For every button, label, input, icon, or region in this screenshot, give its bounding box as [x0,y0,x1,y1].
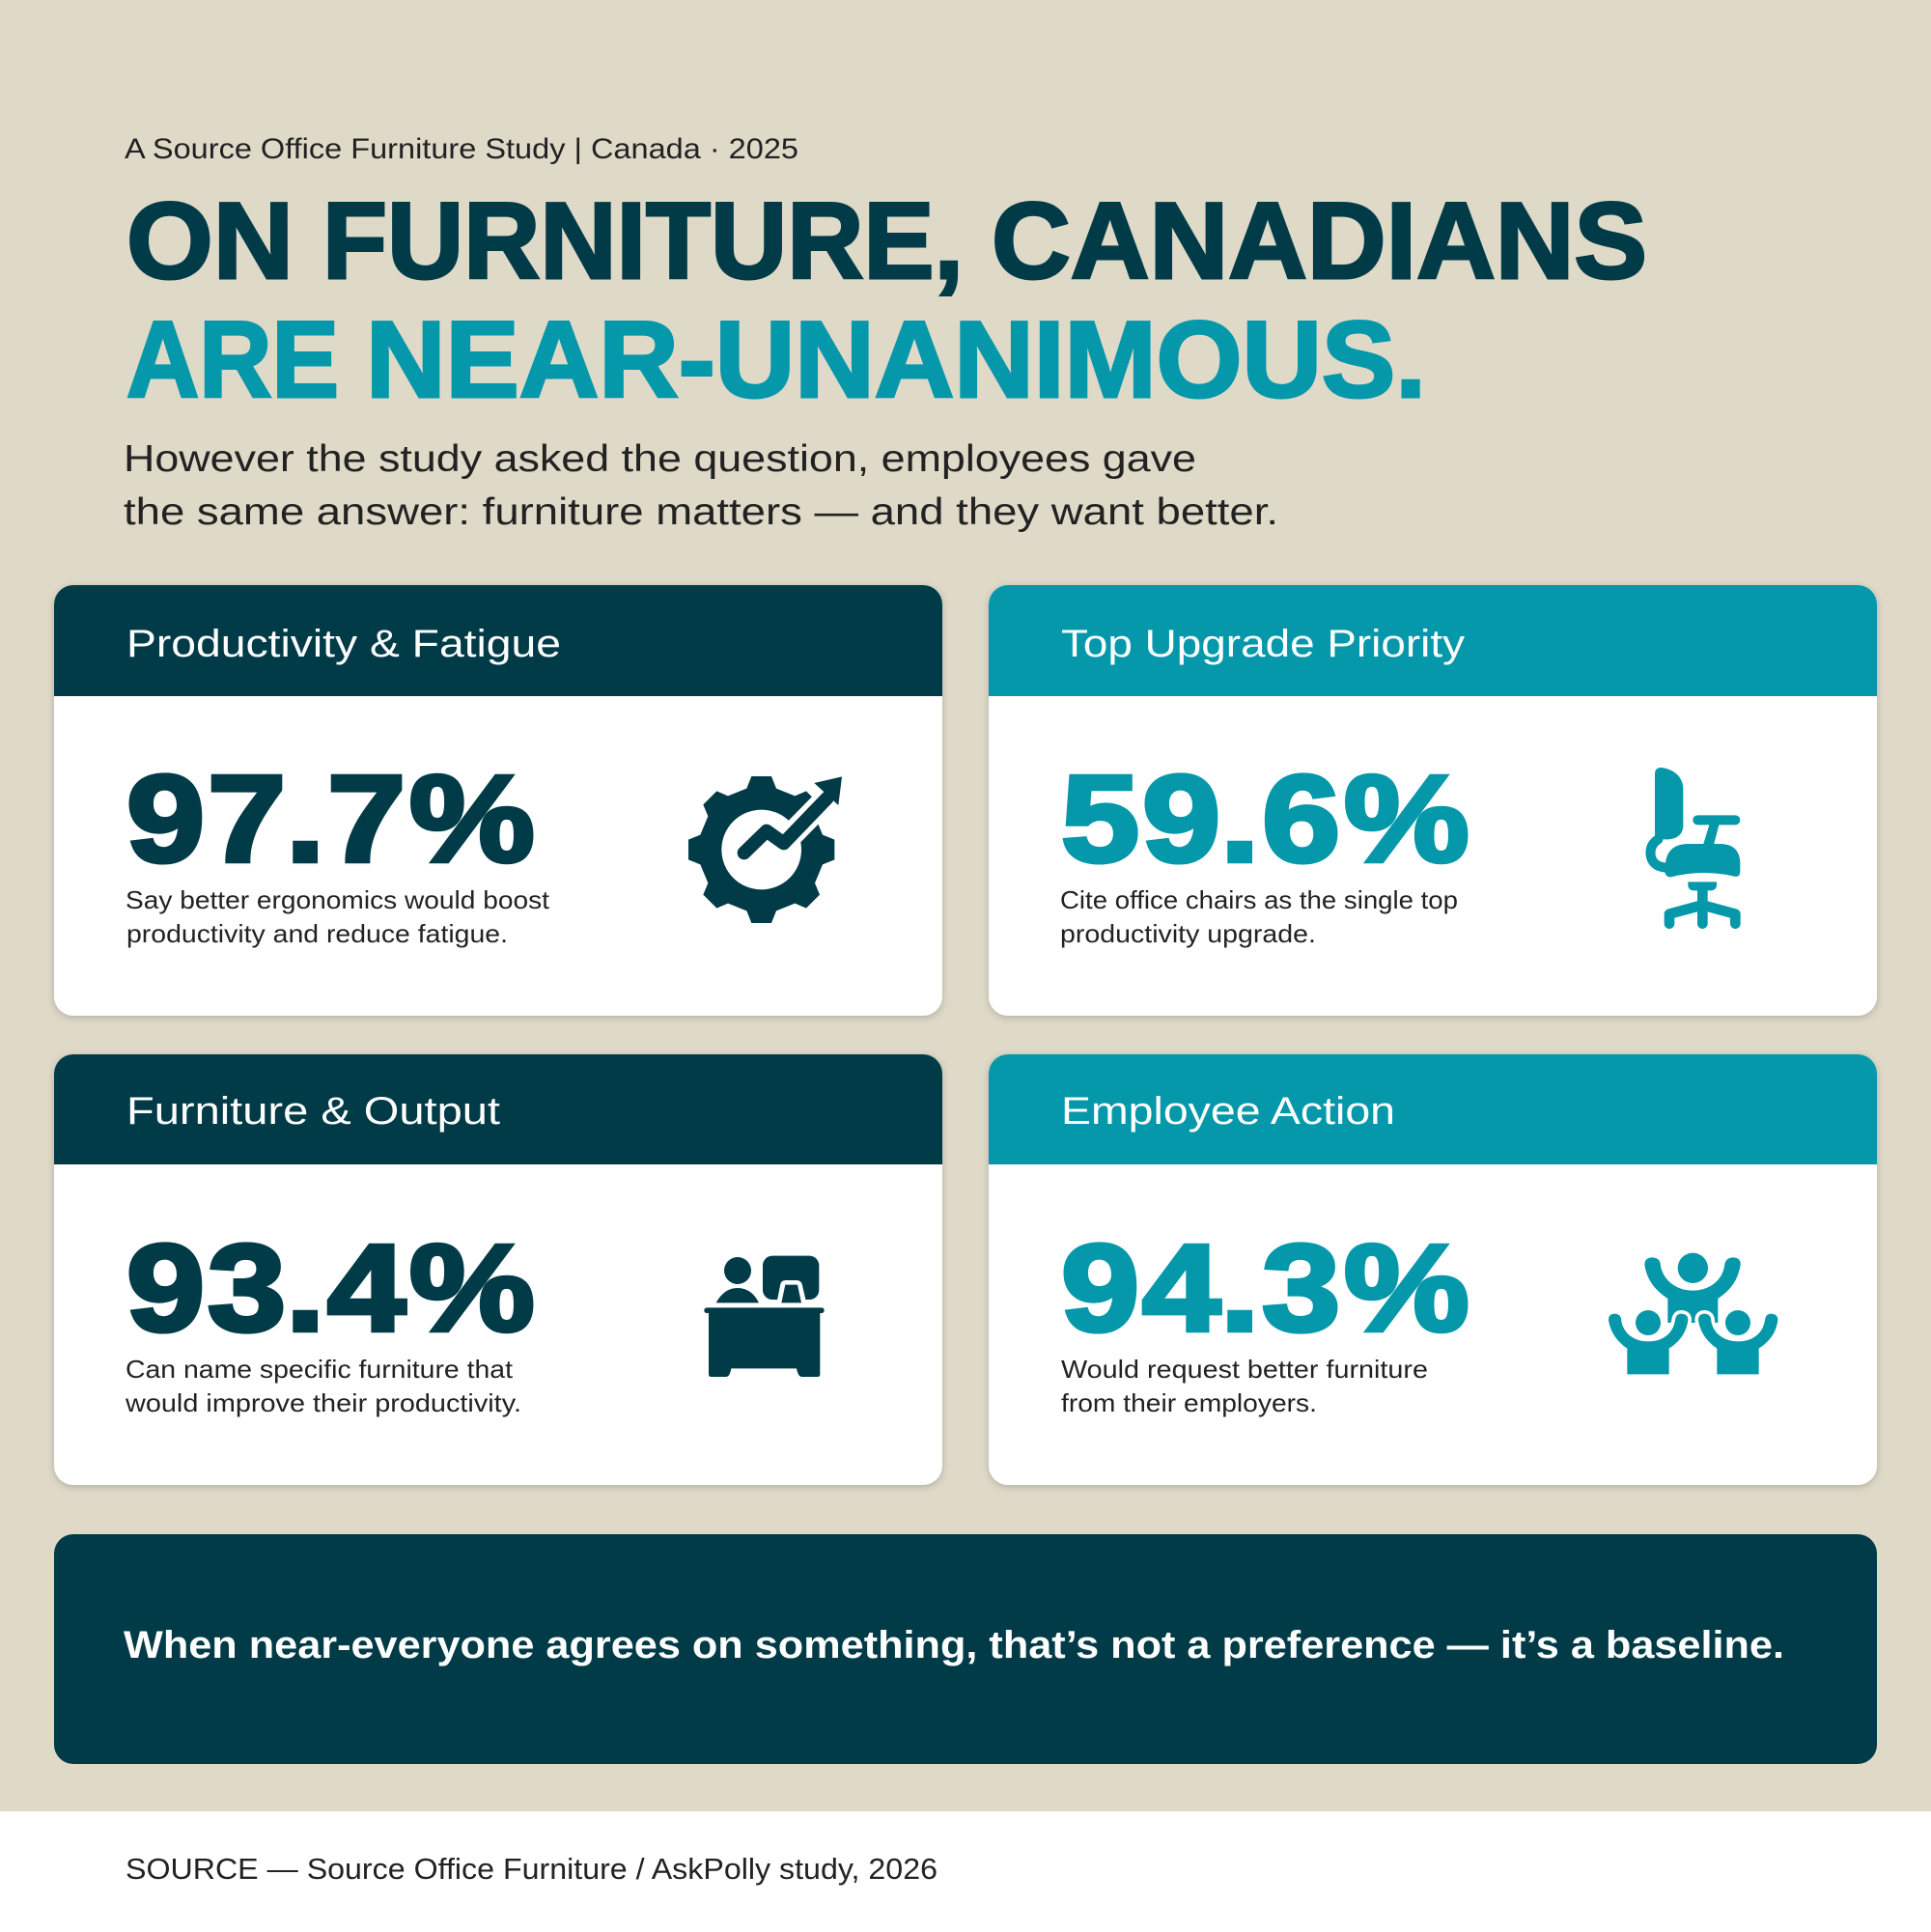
panel: furniture and output [54,1054,942,1485]
subtitle: However the study asked the question, employees gave [124,438,1196,480]
description: Cite office chairs as the single top [1060,885,1458,914]
panel: productivity and fatigue [54,585,942,1016]
panel heading: Furniture & Output [126,1090,500,1133]
panel header [54,1054,942,1164]
panel: top upgrade priority [989,585,1877,1016]
description [126,885,550,948]
icon: group of people with raised arms [1583,1253,1796,1385]
title [126,181,1647,420]
callout banner [54,1534,1877,1764]
statistic: 97.7% [126,750,535,888]
description: from their employers. [1061,1388,1317,1417]
panel header [54,585,942,696]
title: ON [126,181,294,301]
panel: employee action [989,1054,1877,1485]
description: Would request better furniture [1061,1355,1428,1384]
description: Can name specific furniture that [126,1355,514,1384]
panel heading: Productivity & Fatigue [126,623,561,665]
icon: gear with rising arrow [688,776,842,923]
title: CANADIANS [992,181,1647,301]
subtitle [124,438,1278,533]
icon: office chair [1650,768,1740,924]
statistic: 93.4% [126,1219,535,1358]
panel heading: Top Upgrade Priority [1061,623,1465,665]
description: Say better ergonomics would boost [126,885,550,914]
subtitle: the same answer: furniture matters — and they want better. [124,491,1278,533]
statistic: 59.6% [1061,750,1469,888]
description: productivity upgrade. [1060,919,1316,948]
footer [0,1811,1931,1932]
description: productivity and reduce fatigue. [126,919,508,948]
icon: person at desk [704,1256,825,1377]
panel header [989,585,1877,696]
source note: SOURCE — Source Office Furniture / AskPolly study, 2026 [126,1852,938,1886]
description [1060,885,1458,948]
description [125,1355,521,1417]
statistic: 94.3% [1061,1219,1469,1358]
description [1061,1355,1428,1417]
callout text: When near-everyone agrees on something, that’s not a preference — it’s a baseline. [124,1624,1784,1666]
title: ARE [126,299,339,420]
title: NEAR-UNANIMOUS. [366,299,1426,420]
description: would improve their productivity. [125,1388,521,1417]
eyebrow: A Source Office Furniture Study | Canada · 2025 [125,133,798,165]
panel heading: Employee Action [1061,1090,1395,1133]
panel header [989,1054,1877,1164]
title: FURNITURE, [322,181,964,301]
